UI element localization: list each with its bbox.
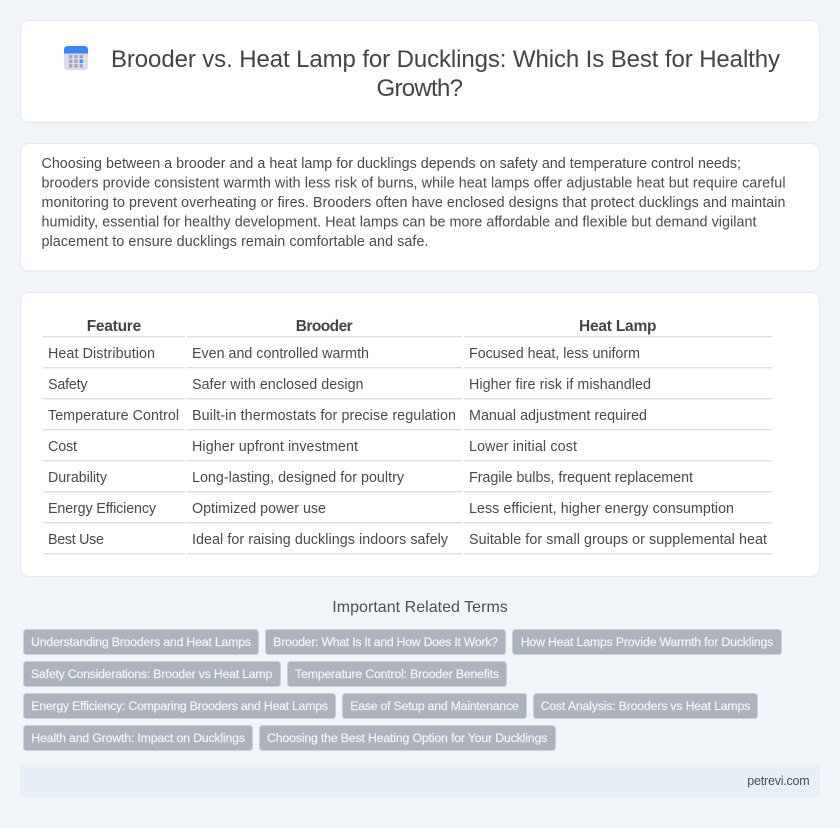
table row: best use <box>43 532 772 554</box>
tag: understanding brooders and heat lamps <box>24 630 258 654</box>
tag: health and growth: Health and Growth: Impact on Ducklings <box>31 731 245 745</box>
table row: safety: Safety <box>48 377 88 393</box>
tag: energy efficiency: Energy Efficiency: Comparing Brooders and Heat Lamps <box>31 699 328 713</box>
table row: temperature control: Temperature Control <box>48 408 179 424</box>
title: Growth? <box>376 75 463 102</box>
tag: temperature control: Temperature Control: Brooder Benefits <box>295 667 499 681</box>
table row: temperature control <box>43 408 772 430</box>
table header row: Heat Lamp <box>579 318 656 335</box>
heading: important related terms: Important Related Terms <box>332 599 508 616</box>
table row: heat distribution <box>43 346 772 368</box>
table row: durability: Long-lasting, designed for poultry <box>192 470 405 486</box>
table row: durability <box>43 470 772 492</box>
table row: cost: Higher upfront investment <box>192 439 358 455</box>
tag: brooder what is it: Brooder: What Is It and How Does It Work? <box>273 635 498 649</box>
tag: safety considerations <box>24 662 280 686</box>
table row: heat distribution: Even and controlled warmth <box>192 346 369 362</box>
table row: best use: Best Use <box>48 532 104 548</box>
table row: cost: Cost <box>48 439 77 455</box>
title <box>111 46 780 102</box>
table row: safety: Safer with enclosed design <box>192 377 364 393</box>
table row: temperature control: Manual adjustment required <box>469 408 647 424</box>
table row: cost <box>43 439 772 461</box>
tag: choosing the best heating option: Choosing the Best Heating Option for Your Ducklings <box>267 731 547 745</box>
text block: introduction paragraph <box>42 156 786 250</box>
table row: safety: Higher fire risk if mishandled <box>469 377 651 393</box>
table row: energy efficiency: Optimized power use <box>192 501 326 517</box>
table row: durability: Fragile bulbs, frequent replacement <box>469 470 693 486</box>
table row: heat distribution: Heat Distribution <box>48 346 155 362</box>
footer source text: petrevi.com <box>747 774 810 788</box>
footer <box>20 764 820 798</box>
panel: comparison table <box>20 292 820 576</box>
table row: temperature control: Built-in thermostats for precise regulation <box>192 408 456 424</box>
table row: heat distribution: Focused heat, less uniform <box>469 346 640 362</box>
text block: introduction paragraph: placement to ensure ducklings remain comfortable and safe. <box>42 234 428 250</box>
tag: energy efficiency <box>24 694 336 718</box>
panel: introduction <box>20 144 820 271</box>
tag: how heat lamps provide warmth <box>512 630 782 654</box>
tag: ease of setup <box>342 694 526 718</box>
title: Brooder vs. Heat Lamp for Ducklings: Which Is Best for Healthy <box>111 46 780 73</box>
text block: introduction paragraph: brooders provide consistent warmth with less risk of burns, while heat lamps offer adjustable heat but require careful <box>42 176 786 192</box>
table row: energy efficiency: Less efficient, higher energy consumption <box>469 501 734 517</box>
icon: calendar <box>64 46 88 70</box>
text block: introduction paragraph: Choosing between a brooder and a heat lamp for ducklings depends on safety and temperature control needs; <box>42 156 741 172</box>
panel: title header <box>20 20 820 122</box>
tag: cost analysis <box>534 694 758 718</box>
tag: safety considerations: Safety Considerations: Brooder vs Heat Lamp <box>31 667 272 681</box>
tag: ease of setup: Ease of Setup and Maintenance <box>350 699 519 713</box>
tag: brooder what is it <box>266 630 506 654</box>
related terms tags <box>24 630 782 750</box>
table header row <box>43 318 772 337</box>
table header row: Feature <box>87 318 142 335</box>
text block: introduction paragraph: humidity, essential for healthy development. Heat lamps can be more affordable and flexible but demand vigilant <box>42 214 757 230</box>
table header row: Brooder <box>296 318 353 335</box>
tag: cost analysis: Cost Analysis: Brooders vs Heat Lamps <box>541 699 750 713</box>
tag: how heat lamps provide warmth: How Heat Lamps Provide Warmth for Ducklings <box>521 635 773 649</box>
text block: introduction paragraph: monitoring to prevent overheating or fires. Brooders often have enclosed designs that protect ducklings and maintain <box>42 195 786 211</box>
tag: temperature control <box>288 662 506 686</box>
tag: health and growth <box>24 726 252 750</box>
table row: best use: Suitable for small groups or supplemental heat <box>469 532 767 548</box>
table row: energy efficiency: Energy Efficiency <box>48 501 157 517</box>
tag: understanding brooders and heat lamps: Understanding Brooders and Heat Lamps <box>31 635 251 649</box>
tag: choosing the best heating option <box>260 726 556 750</box>
table row: safety <box>43 377 772 399</box>
table row: energy efficiency <box>43 501 772 523</box>
table row: cost: Lower initial cost <box>469 439 577 455</box>
table row: best use: Ideal for raising ducklings indoors safely <box>192 532 449 548</box>
table row: durability: Durability <box>48 470 108 486</box>
